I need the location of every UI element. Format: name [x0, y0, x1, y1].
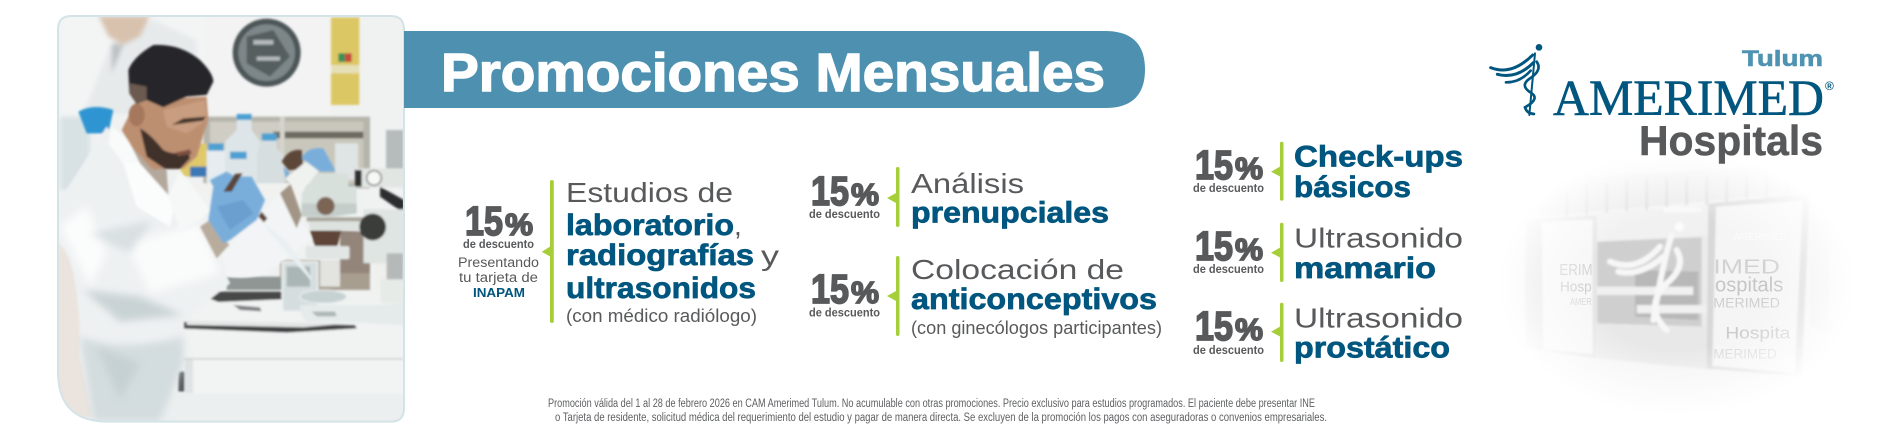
AMERIMED: AMERIMED — [1553, 71, 1824, 127]
service text: ultrasonidos — [566, 272, 756, 305]
heading: Promociones Mensuales: Promociones Mensuales — [441, 43, 1105, 103]
divider with arrow — [542, 180, 554, 323]
second glove — [302, 148, 335, 172]
discount badge: 15 — [465, 198, 503, 244]
blurred blue glove — [78, 107, 113, 133]
footer legal text: o Tarjeta de residente, solicitud médica del requerimiento del estudio y pagar de manera directa. Se excluyen de la promoción los pagos con aseguradoras o convenios empresariales. — [555, 412, 1327, 424]
service text: mamario — [1294, 252, 1436, 285]
lower back area — [280, 260, 370, 290]
registered mark: ® — [1825, 79, 1834, 93]
discount badge: de descuento — [1193, 264, 1264, 276]
promo: ultrasonido mamario — [1193, 222, 1463, 285]
service text — [1294, 140, 1463, 204]
discount badge: de descuento — [1193, 183, 1264, 195]
discount badge — [1193, 142, 1264, 195]
shelf — [203, 117, 370, 188]
main glove — [208, 172, 265, 243]
promo: análisis prenupciales — [809, 167, 1109, 230]
discount badge: % — [505, 207, 533, 242]
discount badge: % — [1235, 151, 1263, 186]
discount badge: 15 — [811, 168, 849, 214]
service text: Estudios de — [566, 177, 733, 208]
discount badge — [809, 168, 880, 221]
left cuff — [200, 220, 229, 258]
logo: Amerimed Hospitals Tulum — [1491, 44, 1834, 164]
faded hospital entrance photo — [1526, 176, 1808, 374]
icon: caduceus — [1491, 44, 1542, 115]
promo: colocación de anticonceptivos — [809, 254, 1162, 338]
service text: básicos — [1294, 171, 1411, 204]
service text: Ultrasonido — [1294, 302, 1463, 333]
neck and face — [122, 97, 208, 170]
service text: Colocación de — [911, 254, 1124, 285]
discount badge: de descuento — [1193, 345, 1264, 357]
discount badge: % — [1235, 312, 1263, 347]
service text — [566, 177, 779, 326]
divider with arrow — [887, 256, 900, 336]
promo: ultrasonido prostático — [1193, 302, 1463, 364]
discount badge — [809, 266, 880, 320]
service text: Análisis — [911, 168, 1024, 199]
Tulum: Tulum — [1742, 46, 1823, 71]
panel: laboratory photo — [58, 16, 407, 423]
faded door lettering: ospitals — [1715, 274, 1783, 297]
service text — [911, 168, 1109, 230]
footer legal text: Promoción válida del 1 al 28 de febrero 2026 en CAM Amerimed Tulum. No acumulable con otras promociones. Precio exclusivo para estudios programados. El paciente debe presentar INE — [548, 398, 1315, 410]
service text: y — [761, 240, 779, 271]
service text — [911, 254, 1162, 338]
title banner — [404, 31, 1145, 108]
service text: anticonceptivos — [911, 283, 1157, 316]
discount badge: de descuento — [809, 308, 880, 320]
desk — [185, 298, 358, 334]
faded door lettering: Hospita — [1725, 323, 1791, 342]
discount badge: 15 — [1195, 303, 1233, 349]
promo: check-ups básicos — [1193, 140, 1463, 204]
hair — [128, 45, 213, 107]
chair — [58, 243, 93, 422]
discount badge: tu tarjeta de — [459, 270, 538, 285]
discount badge: % — [851, 275, 879, 310]
discount badge: INAPAM — [473, 285, 525, 300]
divider with arrow — [1271, 303, 1284, 362]
discount badge: de descuento — [809, 209, 880, 221]
coat: body — [68, 125, 231, 386]
service text: prostático — [1294, 332, 1450, 364]
footer legal text — [548, 398, 1327, 424]
service text — [1294, 302, 1463, 364]
yellow panel — [331, 17, 359, 105]
discount badge — [1193, 223, 1264, 276]
pipette — [223, 173, 242, 192]
service text: prenupciales — [911, 196, 1109, 230]
discount badge: 15 — [1195, 223, 1233, 269]
faded door lettering: IMED — [1713, 255, 1780, 278]
discount badge: Presentando — [458, 255, 539, 270]
discount badge: 15 — [1195, 142, 1233, 188]
faded door lettering: MERIMED — [1713, 346, 1777, 362]
promo: laboratorio, radiografías y ultrasonidos — [458, 177, 779, 326]
faded door lettering: MERIMED — [1713, 294, 1780, 310]
service text: (con médico radiólogo) — [566, 306, 757, 326]
divider with arrow — [1271, 223, 1284, 282]
discount badge: % — [1235, 232, 1263, 267]
microscope — [386, 130, 403, 170]
discount badge — [458, 198, 539, 300]
faded door lettering: AMER — [1570, 297, 1592, 308]
service text: Check-ups — [1294, 140, 1463, 174]
divider with arrow — [887, 167, 900, 227]
faded door lettering — [1560, 260, 1790, 358]
Hospitals: Hospitals — [1639, 117, 1823, 164]
divider with arrow — [1271, 142, 1284, 201]
service text: (con ginecólogos participantes) — [911, 318, 1162, 338]
service text: Ultrasonido — [1294, 222, 1463, 253]
faded door lettering: AMERIMED — [1733, 232, 1787, 243]
faded door lettering: Hosp — [1560, 280, 1592, 296]
service text — [1294, 222, 1463, 285]
right forearm — [222, 193, 312, 278]
service text: laboratorio — [566, 209, 734, 242]
discount badge: 15 — [811, 266, 849, 312]
service text: , — [734, 210, 742, 241]
shirt collar — [130, 143, 168, 195]
wall clock — [233, 19, 301, 87]
discount badge: % — [851, 177, 879, 212]
beaker and dish — [282, 262, 318, 311]
faded door lettering: ERIM — [1559, 262, 1593, 279]
discount badge — [1193, 303, 1264, 357]
discount badge: de descuento — [463, 239, 534, 251]
service text: radiografías — [566, 239, 754, 272]
